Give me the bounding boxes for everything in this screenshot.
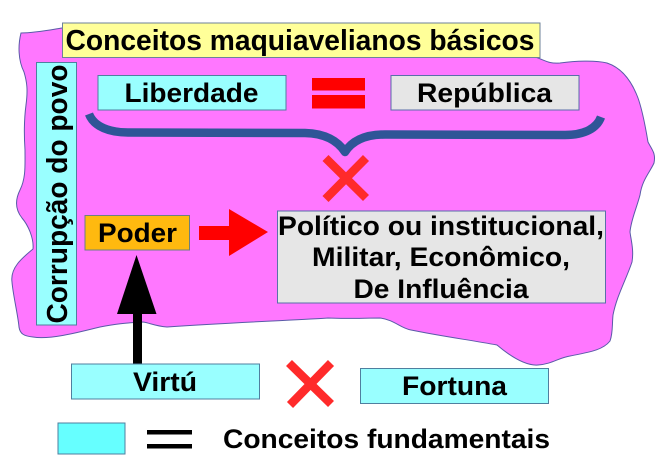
arrow: red arrow from Poder to power types bbox=[199, 209, 268, 256]
box: types of power: Político ou institucional, bbox=[278, 211, 604, 241]
box: Virtú: Virtú bbox=[133, 367, 197, 397]
box: Poder bbox=[85, 216, 190, 250]
arrow: black arrow from Virtú to Poder bbox=[117, 255, 156, 365]
icon: red cross between brace and power types bbox=[326, 158, 366, 199]
box: Fortuna: Fortuna bbox=[402, 371, 508, 401]
legend swatch bbox=[58, 423, 125, 454]
box: Liberdade: Liberdade bbox=[124, 78, 258, 108]
panel: pink background blob bbox=[12, 28, 655, 365]
box: types of power: De Influência bbox=[354, 274, 530, 304]
box: República: República bbox=[417, 78, 553, 108]
legend text: Conceitos fundamentais bbox=[223, 424, 550, 454]
title: Conceitos maquiavelianos básicos bbox=[66, 25, 534, 57]
legend bbox=[58, 423, 550, 454]
box: Poder: Poder bbox=[98, 218, 177, 248]
box: República bbox=[391, 76, 579, 110]
box: Liberdade bbox=[98, 76, 286, 110]
box: Virtú bbox=[72, 364, 260, 399]
legend equals sign bbox=[147, 430, 192, 448]
label: Corrupção do povo: Corrupção do povo bbox=[42, 64, 74, 324]
icon: red cross between Virtú and Fortuna bbox=[289, 363, 331, 405]
box: types of power bbox=[278, 211, 606, 304]
icon: red equals sign bbox=[312, 78, 365, 108]
icon: blue curly brace bbox=[89, 114, 601, 152]
box: types of power: Militar, Econômico, bbox=[312, 242, 570, 272]
box: Fortuna bbox=[360, 368, 548, 404]
